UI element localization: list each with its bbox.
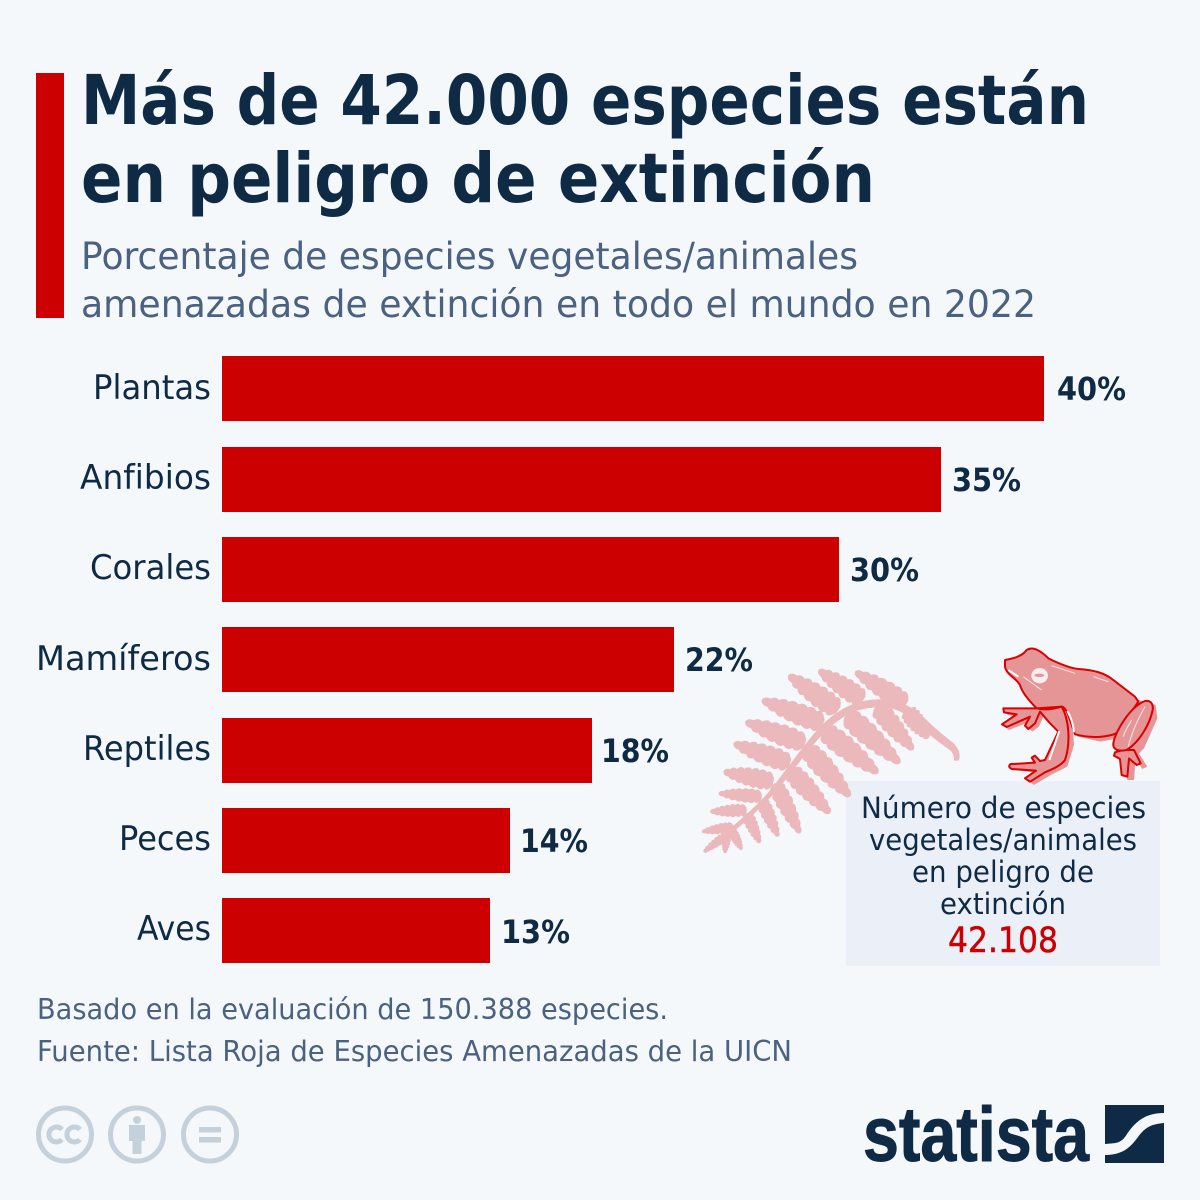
frog front legs bbox=[1002, 707, 1068, 782]
callout box: extinción bbox=[940, 887, 1066, 921]
source note: Fuente: Lista Roja de Especies Amenazadas de la UICN bbox=[37, 1035, 792, 1068]
callout box: 42.108 bbox=[948, 921, 1058, 961]
icon: fern bbox=[701, 661, 960, 856]
bar: Mamíferos: 22% bbox=[685, 641, 753, 679]
title accent bar bbox=[36, 73, 64, 318]
bar: Peces: Peces bbox=[119, 819, 211, 858]
bar: Anfibios bbox=[80, 447, 1021, 512]
subtitle: Porcentaje de especies vegetales/animales bbox=[81, 235, 858, 278]
bar: Mamíferos: Mamíferos bbox=[36, 639, 211, 678]
title: en peligro de extinción bbox=[81, 139, 875, 219]
bar chart bbox=[36, 356, 1126, 963]
callout box: Número de especies bbox=[861, 791, 1146, 825]
bar: Corales bbox=[90, 537, 919, 602]
bar: Reptiles bbox=[83, 718, 669, 783]
bar: Aves: 13% bbox=[501, 913, 570, 951]
bar: Plantas: 40% bbox=[1057, 370, 1126, 408]
subtitle bbox=[81, 235, 1036, 326]
frog hind leg bbox=[1114, 750, 1141, 777]
source note bbox=[37, 993, 792, 1068]
icon: cc bbox=[38, 1108, 92, 1161]
bar: Anfibios: 35% bbox=[952, 461, 1021, 499]
callout box: vegetales/animales bbox=[869, 823, 1137, 857]
icon: creative commons licence bbox=[38, 1108, 236, 1161]
icon: statista mark bbox=[1105, 1105, 1164, 1163]
callout box bbox=[846, 781, 1160, 966]
bar: Mamíferos bbox=[36, 627, 753, 692]
bar: Plantas: Plantas bbox=[93, 368, 211, 407]
bar: Anfibios: Anfibios bbox=[80, 458, 211, 497]
bar: Plantas bbox=[93, 356, 1126, 421]
icon: no derivatives bbox=[184, 1108, 236, 1161]
callout box: en peligro de bbox=[912, 855, 1094, 889]
bar: Reptiles: Reptiles bbox=[83, 729, 211, 768]
frog highlights bbox=[1023, 666, 1145, 747]
bar: Aves bbox=[137, 898, 570, 963]
subtitle: amenazadas de extinción en todo el mundo en 2022 bbox=[81, 283, 1036, 326]
frog shadow bbox=[1006, 652, 1157, 785]
frog body bbox=[1005, 648, 1138, 737]
bar: Peces: 14% bbox=[520, 822, 588, 860]
bar: Peces bbox=[119, 808, 588, 873]
bar: Reptiles: 18% bbox=[601, 732, 669, 770]
bar: Aves: Aves bbox=[137, 909, 211, 948]
bar: Corales: Corales bbox=[90, 548, 211, 587]
statista logo: statista bbox=[863, 1092, 1090, 1178]
icon: frog bbox=[1002, 648, 1157, 785]
source note: Basado en la evaluación de 150.388 especies. bbox=[37, 993, 668, 1026]
icon: attribution bbox=[110, 1108, 164, 1161]
bar: Corales: 30% bbox=[850, 551, 919, 589]
frog eye bbox=[1031, 668, 1048, 683]
title bbox=[81, 61, 1089, 219]
